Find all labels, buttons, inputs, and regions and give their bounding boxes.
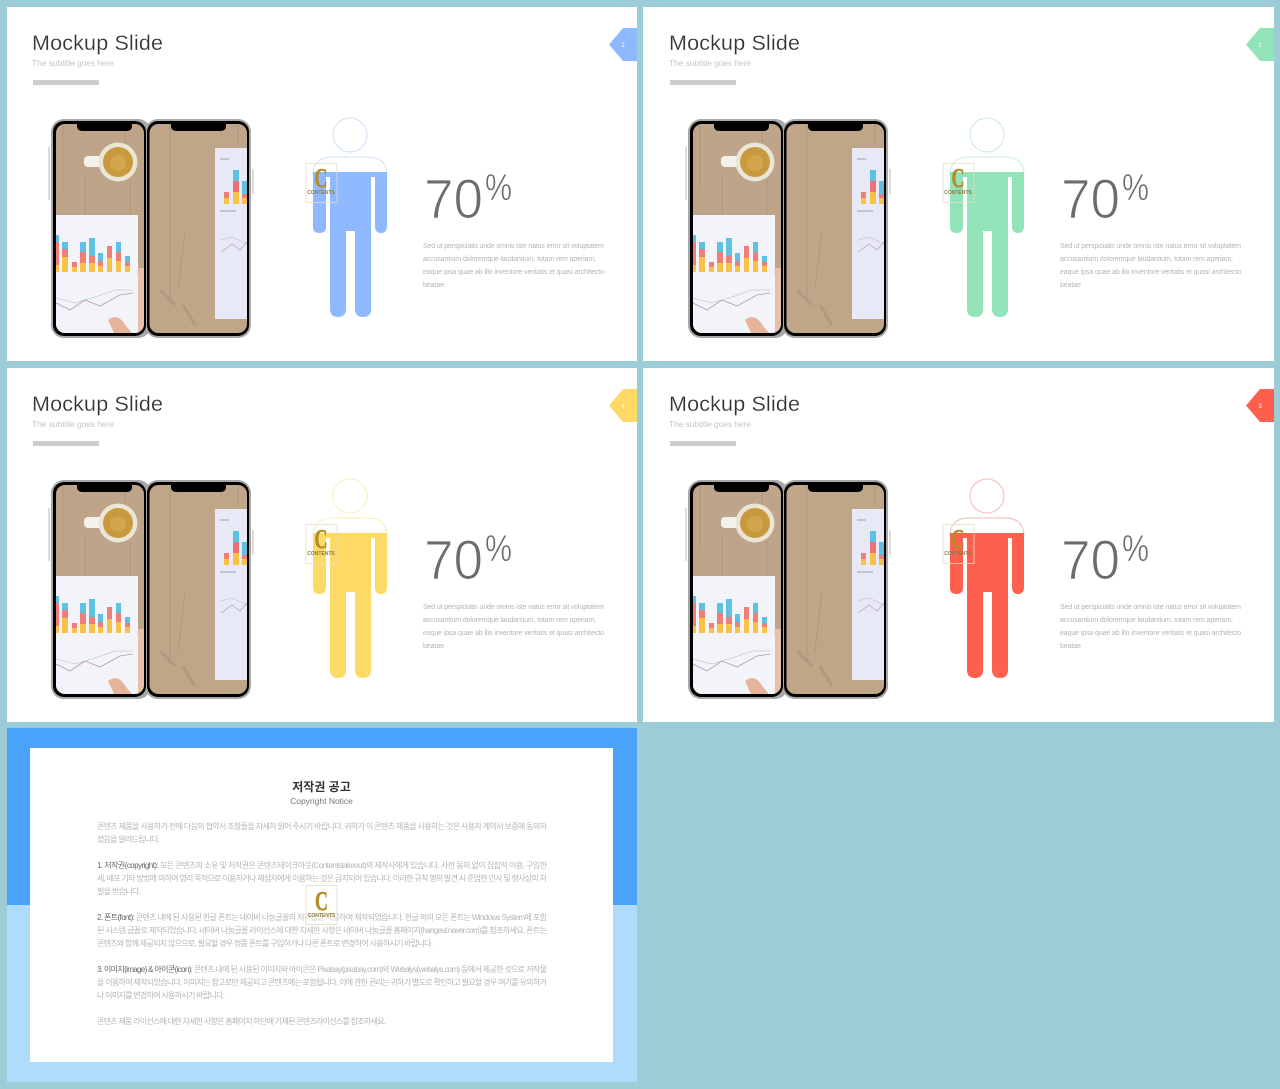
watermark: CONTENTS: [944, 551, 972, 557]
watermark: C: [952, 163, 964, 193]
page tab: [1246, 28, 1274, 61]
body text: Sed ut perspiciatis unde omnis iste natus error sit voluptatem: [423, 243, 604, 250]
notice intro text: 셨음을 알려드립니다.: [97, 834, 160, 844]
notice subheading: Copyright Notice: [290, 796, 353, 806]
percentage: 70: [1061, 528, 1120, 591]
body text: [423, 604, 604, 650]
phone mockup: [49, 480, 253, 699]
body text: eaque ipsa quae ab illo inventore veritatis et quasi architecto: [423, 630, 604, 637]
title: Mockup Slide: [32, 31, 163, 55]
watermark: C: [315, 886, 328, 916]
watermark: [943, 524, 974, 564]
body text: beatae: [423, 643, 444, 650]
watermark: [306, 524, 337, 564]
panel: yellow mockup slide: [7, 368, 637, 722]
phone mockup: [686, 480, 890, 699]
body text: beatae: [423, 282, 444, 289]
body text: eaque ipsa quae ab illo inventore veritatis et quasi architecto: [423, 269, 604, 276]
title: Mockup Slide: [669, 31, 800, 55]
page tab: [1246, 389, 1274, 422]
body text: accusantium doloremque laudantium, totam rem aperiam,: [1060, 256, 1233, 263]
notice intro text: [97, 821, 548, 844]
notice section: font: 2. 폰트(font): 콘텐츠 내에 된 사용된 한글 폰트는 네이버 나눔글꼴의 저작물을 제공하여 제작되었습니다. 한글 외의 모든 폰트는 Windows System에 포함: [97, 912, 548, 922]
phone mockup: [49, 119, 253, 338]
percentage: %: [485, 167, 512, 208]
body text: eaque ipsa quae ab illo inventore veritatis et quasi architecto: [1060, 269, 1241, 276]
notice section: font: [97, 912, 548, 948]
body text: Sed ut perspiciatis unde omnis iste natus error sit voluptatem: [423, 604, 604, 611]
watermark: C: [314, 524, 328, 554]
watermark: CONTENTS: [308, 913, 336, 919]
title bar: [33, 441, 99, 446]
notice heading: 저작권 공고: [292, 779, 351, 794]
notice section: copyright: 1. 저작권(copyright): 모든 콘텐츠의 소유 및 저작권은 콘텐츠테이크아웃(Contentstakeout)의 제작사에게 있습니다. 사전 동의 없이 집합적 이용, 구입한: [97, 860, 548, 870]
title: Mockup Slide: [669, 392, 800, 416]
percentage: 70: [424, 167, 483, 230]
body text: beatae: [1060, 282, 1081, 289]
watermark: CONTENTS: [307, 551, 335, 557]
body text: [1060, 604, 1241, 650]
subtitle: The subtitle goes here: [669, 58, 751, 68]
body text: Sed ut perspiciatis unde omnis iste natus error sit voluptatem: [1060, 604, 1241, 611]
page tab: 3: [1258, 404, 1262, 410]
percentage: 70: [1061, 167, 1120, 230]
page tab: 2: [621, 43, 625, 49]
watermark: CONTENTS: [307, 190, 335, 196]
notice section: copyright: 세, 배포 기타 방법에 의하여 영리 목적으로 이용하거나 제삼자에게 이용하는 것은 금지되어 있습니다. 이러한 규칙 행위 발견 시 준엄한 민사 및 형사상의 처: [97, 873, 547, 883]
page tab: 1: [1258, 43, 1262, 49]
watermark: [306, 886, 337, 924]
notice section: copyright: [97, 860, 548, 896]
panel: red mockup slide: [643, 368, 1274, 722]
notice section: images and icons: [97, 964, 547, 1000]
watermark: [943, 163, 974, 202]
body text: [1060, 243, 1241, 289]
notice section: font: 콘텐츠와 함께 제공되지 않으므로, 필요할 경우 정품 폰트를 구입하거나 다른 폰트로 변경하여 사용하시기 바랍니다.: [97, 938, 433, 948]
notice section: images and icons: 3. 이미지(image) & 아이콘(icon): 콘텐츠 내에 된 사용된 이미지와 아이콘은 Pixabay(pixabay.com)와 Webalys(webalys.com) 등에서 제공한 것으로 저작물: [97, 964, 547, 974]
panel: copyright notice: [7, 728, 637, 1082]
page tab: 4: [621, 404, 625, 410]
person chart: [313, 479, 387, 678]
percentage: %: [1122, 167, 1149, 208]
person chart: [950, 118, 1024, 317]
notice section: images and icons: 을 이용하여 제작되었습니다. 이미지는 참고로만 제공되고 콘텐츠에는 포함됩니다. 이에 관한 권리는 귀하가 별도로 확인하고 필요할 경우 여기를 유의하거: [97, 977, 547, 987]
notice section: copyright: 벌을 받습니다.: [97, 886, 141, 896]
panel: green mockup slide: [643, 7, 1274, 361]
watermark: C: [314, 163, 328, 193]
body text: accusantium doloremque laudantium, totam rem aperiam,: [1060, 617, 1233, 624]
subtitle: The subtitle goes here: [32, 419, 114, 429]
notice intro text: 콘텐츠 제품을 사용하기 전에 다음의 협약서 조항들을 자세히 읽어 주시기 바랍니다. 귀하가 이 콘텐츠 제품을 사용하는 것은 사용자 계약서 보증에 동의하: [97, 821, 548, 831]
notice footer text: 콘텐츠 제품 라이선스에 대한 자세한 사항은 홈페이지 하단에 기재된 콘텐츠라이선스를 참조하세요.: [97, 1016, 386, 1026]
phone mockup: [686, 119, 890, 338]
percentage: 70: [424, 528, 483, 591]
body text: eaque ipsa quae ab illo inventore veritatis et quasi architecto: [1060, 630, 1241, 637]
watermark: [306, 163, 337, 202]
panel: blue mockup slide: [7, 7, 637, 361]
title: Mockup Slide: [32, 392, 163, 416]
watermark: CONTENTS: [944, 190, 972, 196]
body text: Sed ut perspiciatis unde omnis iste natus error sit voluptatem: [1060, 243, 1241, 250]
person chart: [950, 479, 1024, 678]
title bar: [670, 80, 736, 85]
body text: beatae: [1060, 643, 1081, 650]
person chart: [313, 118, 387, 317]
title bar: [33, 80, 99, 85]
notice section: images and icons: 나 이미지를 변경하여 사용하시기 바랍니다.: [97, 990, 225, 1000]
page tab: [609, 28, 637, 61]
percentage: %: [485, 528, 512, 569]
body text: accusantium doloremque laudantium, totam rem aperiam,: [423, 256, 596, 263]
subtitle: The subtitle goes here: [669, 419, 751, 429]
title bar: [670, 441, 736, 446]
percentage: %: [1122, 528, 1149, 569]
watermark: C: [952, 524, 964, 554]
subtitle: The subtitle goes here: [32, 58, 114, 68]
page tab: [609, 389, 637, 422]
notice section: font: 된 시스템 글꼴로 제작되었습니다. 네이버 나눔글꼴 라이선스에 대한 자세한 사항은 네이버 나눔글꼴 홈페이지(hangeul.naver.com)를 참조하세요. 폰트는: [97, 925, 547, 935]
body text: accusantium doloremque laudantium, totam rem aperiam,: [423, 617, 596, 624]
body text: [423, 243, 604, 289]
